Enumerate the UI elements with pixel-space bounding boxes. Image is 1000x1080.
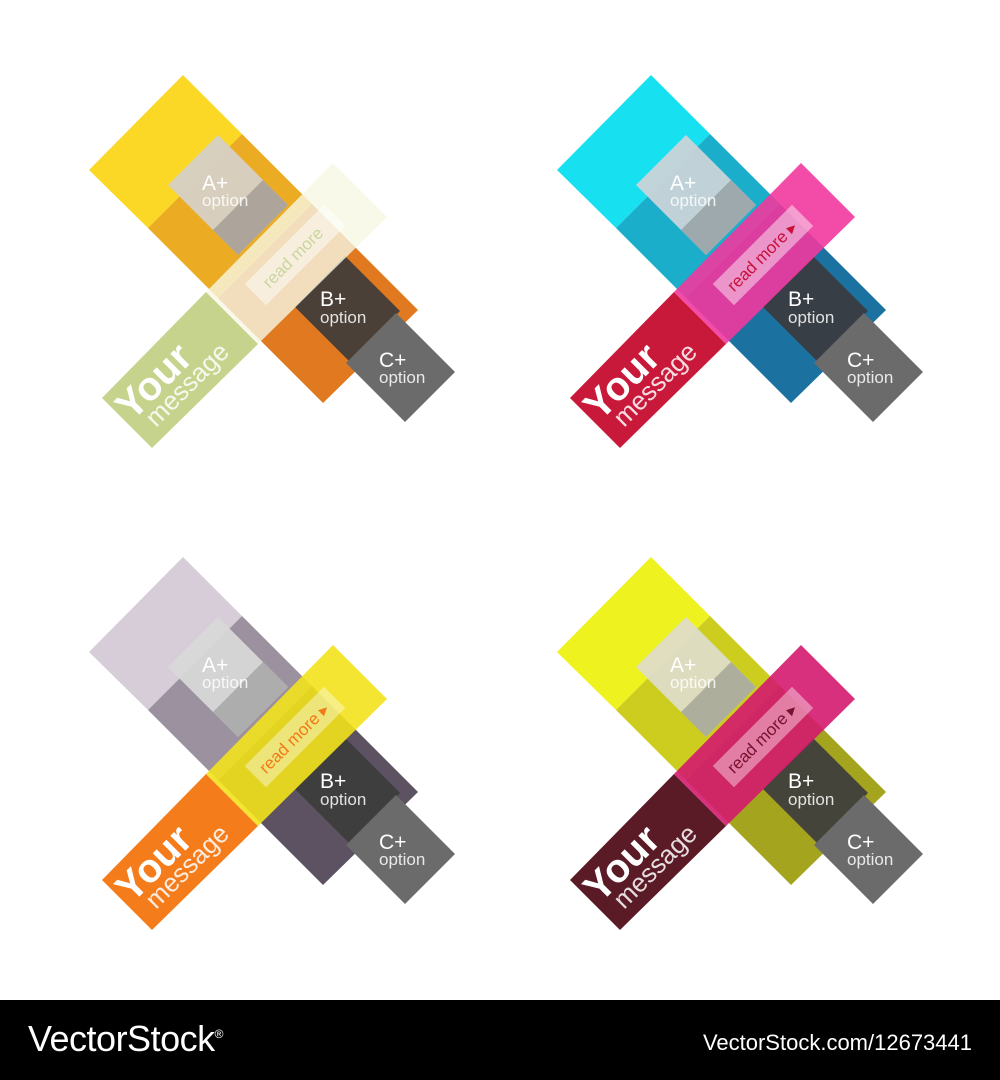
button: read more: read more ▸ xyxy=(255,699,333,777)
button: read more: read more xyxy=(259,224,327,292)
band: main diagonal xyxy=(557,75,886,403)
band: your message: message xyxy=(607,818,703,914)
button: read more: read more ▸ xyxy=(723,217,801,295)
band: your message xyxy=(570,163,855,448)
box: A+ option: A+ xyxy=(202,172,228,195)
box: A+ option xyxy=(168,617,288,737)
button: read more xyxy=(246,688,344,786)
band: your message: Your xyxy=(575,817,669,910)
band: main diagonal xyxy=(89,557,418,885)
band: your message xyxy=(570,645,855,930)
box: C+ option: option xyxy=(847,850,893,869)
box: B+ option xyxy=(763,738,868,844)
band: your message xyxy=(102,645,387,930)
box: A+ option: option xyxy=(670,191,716,210)
box: A+ option xyxy=(168,135,288,255)
box: B+ option: B+ xyxy=(320,288,346,311)
footer bar xyxy=(0,1000,1000,1080)
box: B+ option: option xyxy=(788,790,834,809)
band: main diagonal xyxy=(89,75,418,403)
panel: lilac/orange variant xyxy=(89,557,455,930)
box: A+ option: option xyxy=(202,191,248,210)
box: A+ option xyxy=(636,135,756,255)
box: B+ option: B+ xyxy=(788,288,814,311)
button: read more xyxy=(714,206,812,304)
box: B+ option: B+ xyxy=(788,770,814,793)
footer logo: VectorStock® xyxy=(28,1018,223,1059)
box: B+ option xyxy=(295,256,400,362)
band: your message: Your xyxy=(107,817,201,910)
band: your message: message xyxy=(139,336,235,432)
box: B+ option: B+ xyxy=(320,770,346,793)
box: A+ option: option xyxy=(202,673,248,692)
box: C+ option: C+ xyxy=(379,831,406,854)
box: C+ option: C+ xyxy=(379,349,406,372)
panel: yellow/green variant xyxy=(89,75,455,448)
box: A+ option: A+ xyxy=(670,172,696,195)
box: C+ option: C+ xyxy=(847,349,874,372)
box: B+ option xyxy=(763,256,868,362)
band: your message xyxy=(102,163,387,448)
box: A+ option: A+ xyxy=(202,654,228,677)
box: C+ option xyxy=(814,313,923,422)
band: main diagonal xyxy=(557,557,886,885)
button: read more xyxy=(714,688,812,786)
box: C+ option xyxy=(346,313,455,422)
button: read more xyxy=(246,206,344,304)
box: B+ option: option xyxy=(320,790,366,809)
box: C+ option: C+ xyxy=(847,831,874,854)
box: C+ option: option xyxy=(379,368,425,387)
box: B+ option: option xyxy=(788,308,834,327)
footer url: VectorStock.com/12673441 xyxy=(703,1030,972,1055)
box: C+ option xyxy=(814,795,923,904)
box: C+ option: option xyxy=(847,368,893,387)
box: C+ option xyxy=(346,795,455,904)
band: your message: message xyxy=(139,818,235,914)
panel: lime/maroon variant xyxy=(557,557,923,930)
panel: cyan/red variant xyxy=(557,75,923,448)
box: C+ option: option xyxy=(379,850,425,869)
band: your message: message xyxy=(607,336,703,432)
box: A+ option: option xyxy=(670,673,716,692)
button: read more: read more ▸ xyxy=(723,699,801,777)
box: A+ option xyxy=(636,617,756,737)
box: B+ option: option xyxy=(320,308,366,327)
box: B+ option xyxy=(295,738,400,844)
band: your message: Your xyxy=(575,335,669,428)
band: your message: Your xyxy=(107,335,201,428)
box: A+ option: A+ xyxy=(670,654,696,677)
